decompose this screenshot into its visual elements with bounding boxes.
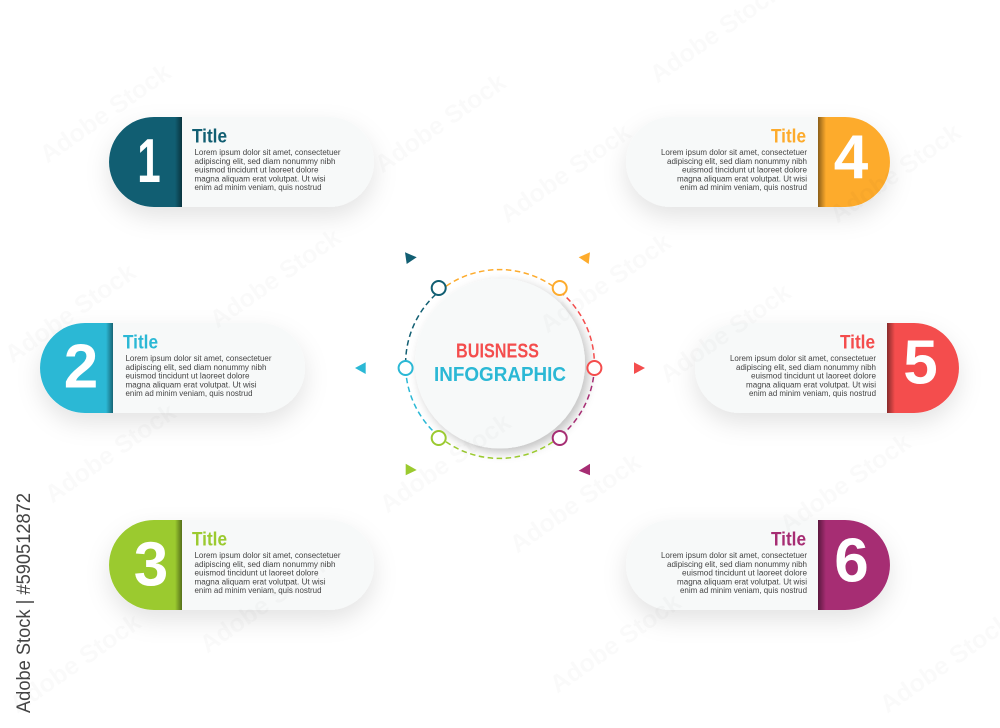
card 2 title: Title bbox=[123, 333, 158, 354]
card 1 body text: Lorem ipsum dolor sit amet, consectetuer bbox=[194, 148, 341, 157]
card 1 number: 1 bbox=[137, 127, 161, 196]
card 1 body text: adipiscing elit, sed diam nonummy nibh bbox=[194, 157, 336, 166]
central diagram bbox=[399, 270, 601, 458]
ring nodes bbox=[399, 281, 601, 445]
card 2 body text: enim ad minim veniam, quis nostrud bbox=[126, 389, 252, 398]
card 3 body text: euismod tincidunt ut laoreet dolore bbox=[194, 569, 319, 578]
card 4 number tab bbox=[818, 117, 890, 207]
card 5 number tab bbox=[887, 323, 959, 413]
card 2 body text: magna aliquam erat volutpat. Ut wisi bbox=[126, 380, 257, 390]
card 1 title: Title bbox=[192, 127, 227, 148]
card 4 body text bbox=[661, 148, 808, 192]
card 1 bbox=[109, 117, 374, 207]
card 6 body text: euismod tincidunt ut laoreet dolore bbox=[682, 569, 808, 578]
card 4 title: Title bbox=[771, 127, 806, 148]
card 3 body text: Lorem ipsum dolor sit amet, consectetuer bbox=[194, 551, 341, 560]
center circle bbox=[415, 278, 585, 448]
dashed ring bbox=[406, 270, 594, 458]
card 5 body text: magna aliquam erat volutpat. Ut wisi bbox=[746, 380, 876, 390]
card 2 number tab bbox=[40, 323, 113, 413]
card 2 panel bbox=[40, 323, 305, 413]
card 3 body text: magna aliquam erat volutpat. Ut wisi bbox=[194, 578, 326, 586]
card 2 number: 2 bbox=[64, 333, 98, 402]
card 5 body text: euismod tincidunt ut laoreet dolore bbox=[751, 372, 877, 381]
card 3 title: Title bbox=[192, 530, 227, 551]
card 6 body text bbox=[661, 551, 808, 595]
stock id label: Adobe Stock | #590512872 bbox=[14, 493, 35, 713]
card 3 body text: enim ad minim veniam, quis nostrud bbox=[194, 586, 322, 595]
card 3 panel bbox=[109, 520, 374, 610]
card 2 body text: Lorem ipsum dolor sit amet, consectetuer bbox=[126, 354, 272, 363]
card 6 number: 6 bbox=[834, 526, 869, 596]
card 3 body text: adipiscing elit, sed diam nonummy nibh bbox=[194, 560, 336, 569]
card 2 body text: euismod tincidunt ut laoreet dolore bbox=[126, 372, 250, 381]
card 4 body text: enim ad minim veniam, quis nostrud bbox=[680, 183, 807, 192]
card 5 body text: adipiscing elit, sed diam nonummy nibh bbox=[736, 363, 876, 372]
card 5 bbox=[695, 323, 959, 413]
card 1 body text: enim ad minim veniam, quis nostrud bbox=[194, 183, 322, 192]
card 2 body text: adipiscing elit, sed diam nonummy nibh bbox=[126, 363, 266, 372]
card 6 number tab bbox=[818, 520, 890, 610]
card 5 body text: enim ad minim veniam, quis nostrud bbox=[749, 389, 876, 398]
card 3 bbox=[109, 520, 374, 610]
card 6 body text: adipiscing elit, sed diam nonummy nibh bbox=[667, 560, 807, 569]
card 6 bbox=[626, 520, 890, 610]
card 4 panel bbox=[626, 117, 890, 207]
arrow markers bbox=[355, 252, 645, 475]
card 5 title: Title bbox=[840, 333, 875, 354]
card 6 body text: magna aliquam erat volutpat. Ut wisi bbox=[677, 578, 807, 586]
card 3 number tab bbox=[109, 520, 182, 610]
center heading: BUISNESS bbox=[456, 340, 539, 362]
card 5 number: 5 bbox=[903, 328, 938, 398]
card 3 number: 3 bbox=[134, 530, 168, 599]
card 6 body text: enim ad minim veniam, quis nostrud bbox=[680, 586, 807, 595]
card 1 panel bbox=[109, 117, 374, 207]
card 2 bbox=[40, 323, 305, 413]
card 5 body text: Lorem ipsum dolor sit amet, consectetuer bbox=[730, 354, 876, 363]
card 6 title: Title bbox=[771, 530, 806, 551]
card 5 panel bbox=[695, 323, 959, 413]
card 4 number: 4 bbox=[834, 123, 869, 192]
card 4 bbox=[626, 117, 890, 207]
center heading: INFOGRAPHIC bbox=[434, 364, 566, 386]
card 2 body text bbox=[126, 354, 272, 398]
card 1 number tab bbox=[109, 117, 182, 207]
card 6 body text: Lorem ipsum dolor sit amet, consectetuer bbox=[661, 551, 807, 560]
center heading bbox=[434, 340, 566, 386]
card 1 body text: magna aliquam erat volutpat. Ut wisi bbox=[194, 174, 326, 184]
card 4 body text: adipiscing elit, sed diam nonummy nibh bbox=[667, 157, 807, 166]
card 4 body text: euismod tincidunt ut laoreet dolore bbox=[682, 166, 808, 175]
card 4 body text: Lorem ipsum dolor sit amet, consectetuer bbox=[661, 148, 807, 157]
card 4 body text: magna aliquam erat volutpat. Ut wisi bbox=[677, 174, 807, 184]
card 5 body text bbox=[730, 354, 877, 398]
card 3 body text bbox=[194, 551, 341, 595]
card 1 body text: euismod tincidunt ut laoreet dolore bbox=[194, 166, 319, 175]
card 1 body text bbox=[194, 148, 341, 192]
card 6 panel bbox=[626, 520, 890, 610]
